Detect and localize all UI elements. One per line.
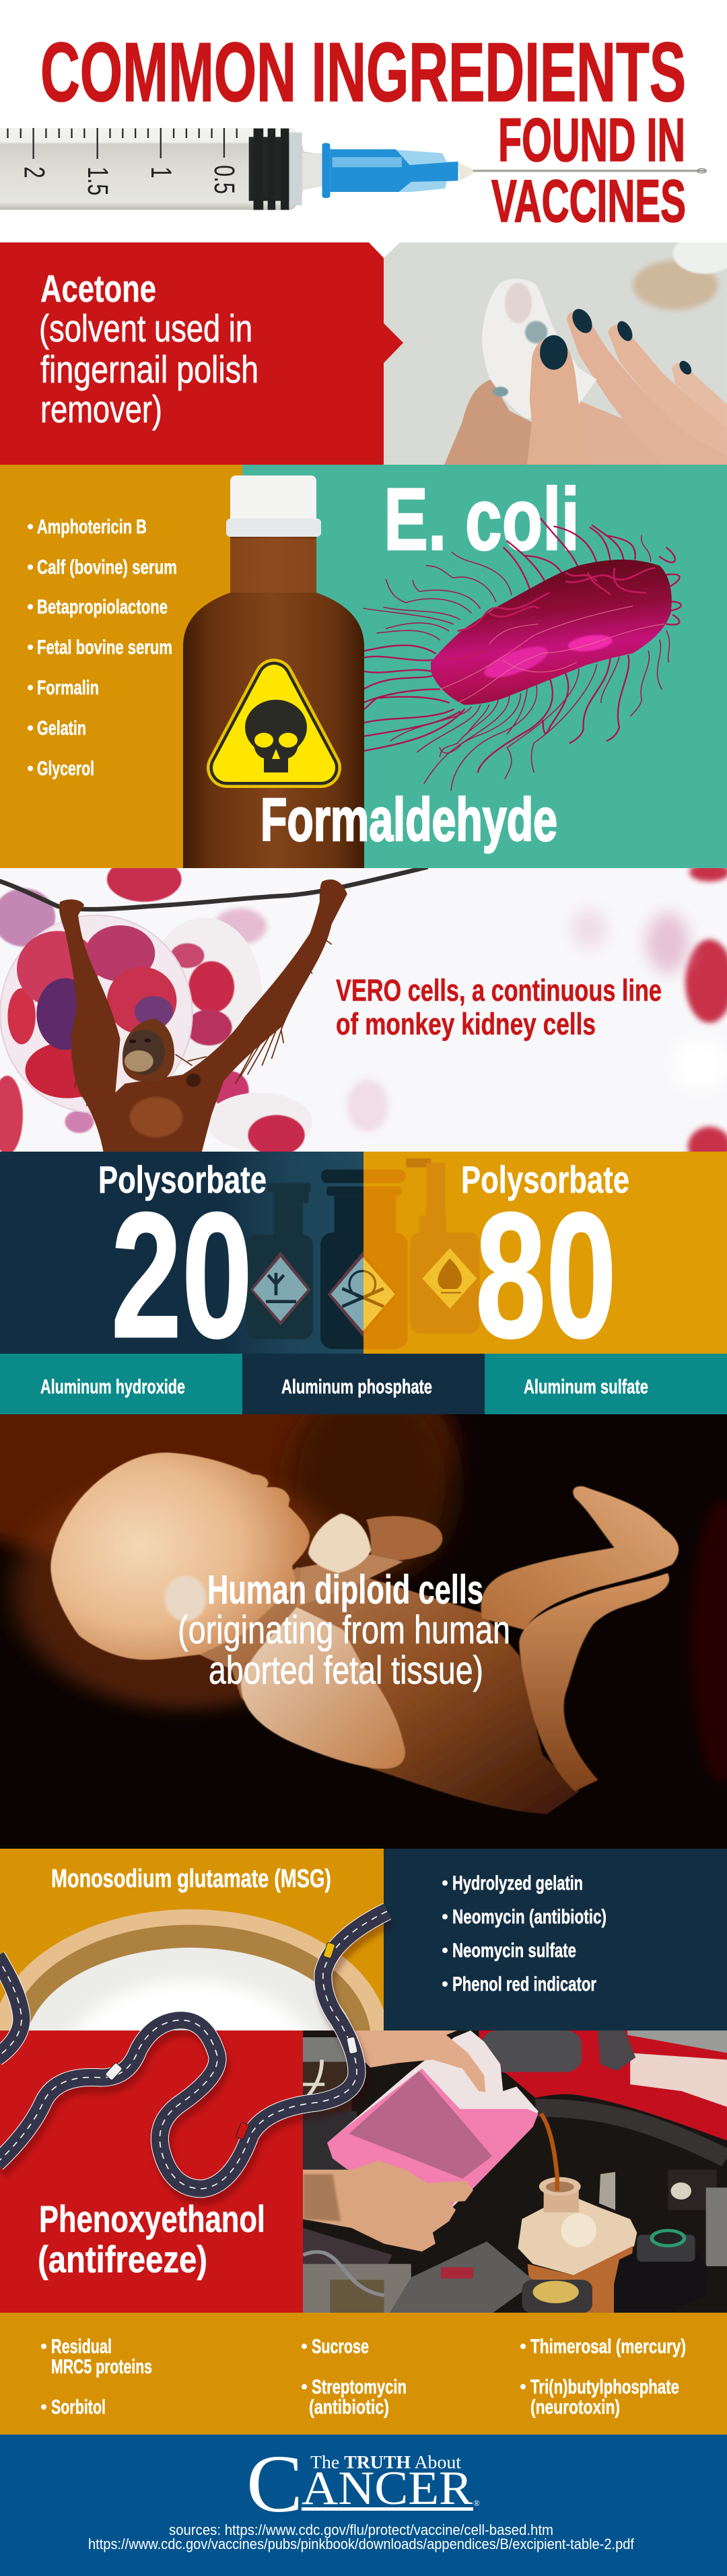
icon: skull hazard label (227, 679, 321, 772)
icon: white car 2 (105, 2062, 123, 2081)
list: ingredients: Calf (bovine) serum (37, 556, 177, 579)
panel: footer (0, 2435, 727, 2576)
panel: acetone (0, 234, 727, 465)
panel: polysorbate (0, 1152, 727, 1375)
upper hand (354, 2030, 485, 2092)
illustration: e. coli bacterium (364, 519, 681, 790)
bottle cap (226, 475, 321, 537)
list: ingredients: Gelatin (37, 717, 86, 739)
panel: monosodium glutamate (0, 1849, 384, 2030)
label: polysorbate 80: 80 (475, 1176, 617, 1375)
panel: navy ingredient list: Neomycin sulfate (452, 1940, 576, 1962)
label: polysorbate 80: Polysorbate (461, 1158, 629, 1201)
logo: the truth about cancer: C (246, 2439, 303, 2530)
icon: chemical bottles, dark half (247, 1169, 364, 1350)
icon: rope (0, 867, 427, 909)
icon: syringe (0, 128, 707, 210)
icon: bowl of msg (0, 1909, 384, 2030)
illustration: fetus (50, 1453, 679, 1814)
logo: the truth about cancer: ® (473, 2498, 480, 2508)
list column 1: Sorbitol (51, 2396, 106, 2418)
text: solvent description (39, 307, 258, 431)
label: polysorbate 20: Polysorbate (98, 1158, 267, 1201)
text: solvent description: remover) (40, 388, 162, 431)
lower palm (579, 401, 662, 465)
cotton pad (482, 279, 597, 419)
list column 2: Streptomycin (312, 2376, 407, 2398)
list: ingredients (28, 516, 177, 780)
label: aluminum hydroxide: Aluminum hydroxide (40, 1376, 185, 1398)
panel: navy ingredient list: Neomycin (antibiotic) (452, 1906, 607, 1928)
text: sources (88, 2521, 635, 2552)
panel: navy ingredient list (384, 1849, 727, 2030)
engine block (390, 2241, 536, 2313)
icon: syringe: 1 (145, 166, 178, 178)
hand (308, 1513, 371, 1573)
heading: acetone: Acetone (40, 267, 156, 310)
lower leg (519, 1573, 669, 1791)
heading: phenoxyethanol: (antifreeze) (38, 2238, 207, 2280)
radiator cap (522, 2280, 592, 2313)
list column 2 (302, 2336, 407, 2418)
panel: aluminum compounds (0, 1354, 727, 1414)
background cells (685, 863, 727, 1167)
heading: phenoxyethanol: Phenoxyethanol (39, 2198, 265, 2240)
red hood (479, 2030, 727, 2140)
antifreeze jug (327, 2030, 539, 2210)
panel: human diploid cells (0, 1414, 727, 1849)
heading: phenoxyethanol (38, 2198, 265, 2280)
label: polysorbate 20 (98, 1158, 267, 1375)
list column 3: Tri(n)butylphosphate (530, 2376, 679, 2398)
list: ingredients: Formalin (37, 677, 99, 699)
list: ingredients: Amphotericin B (37, 516, 147, 538)
rubber seal (536, 2108, 727, 2158)
label: polysorbate 20: 20 (111, 1176, 252, 1375)
text: human diploid cells: Human diploid cells (207, 1567, 483, 1612)
text: vero cells description: of monkey kidney cells (336, 1007, 596, 1041)
icon: yellow car (323, 1942, 335, 1958)
label: msg: Monosodium glutamate (MSG) (51, 1865, 331, 1893)
logo: the truth about cancer: ANCER (302, 2462, 473, 2515)
icon: syringe: 2 (19, 166, 51, 178)
label: aluminum sulfate: Aluminum sulfate (524, 1376, 648, 1398)
icon: syringe: 0.5 (209, 165, 241, 194)
text: solvent description: fingernail polish (40, 348, 258, 391)
list column 2: (antibiotic) (309, 2396, 389, 2418)
head (50, 1453, 310, 1659)
finger c (672, 363, 727, 431)
black bottle with green cap (614, 2231, 709, 2313)
illustration: orangutan (59, 880, 347, 1152)
list column 1: Residual (51, 2336, 112, 2358)
lit arm (241, 1607, 405, 1769)
coolant reservoir (518, 2177, 637, 2313)
list column 2: Sucrose (312, 2336, 369, 2358)
list: ingredients: Glycerol (37, 758, 94, 780)
text: human diploid cells: aborted fetal tissue) (209, 1649, 483, 1692)
photo: pouring antifreeze into car engine (303, 2030, 727, 2313)
panel: navy ingredient list: Phenol red indicator (452, 1973, 596, 1995)
list column 1 (41, 2336, 152, 2418)
list: ingredients: Fetal bovine serum (37, 636, 172, 659)
label: polysorbate 80 (461, 1158, 629, 1375)
thumb (528, 337, 582, 465)
photo: fingernail polish removal (384, 234, 727, 465)
panel: phenoxyethanol (0, 2030, 303, 2313)
icon: chemical bottles, amber half (364, 1158, 479, 1350)
list column 3 (520, 2336, 686, 2418)
icon: brown poison bottle (183, 475, 364, 868)
text: human diploid cells: (originating from human (178, 1608, 510, 1652)
list column 3: (neurotoxin) (530, 2396, 620, 2418)
heading: e. coli: E. coli (384, 469, 580, 568)
logo: the truth about cancer (246, 2439, 480, 2530)
lower hand (303, 2160, 473, 2251)
list column 1: MRC5 proteins (51, 2356, 152, 2378)
text: solvent description: (solvent used in (39, 307, 252, 350)
finger a (567, 311, 727, 465)
text: vero cells description (336, 973, 662, 1041)
upper leg and foot (481, 1486, 679, 1630)
panel: vero cells (0, 857, 727, 1167)
panel: remaining ingredients (0, 2313, 727, 2435)
icon: winding road with cars (0, 1911, 390, 2195)
icon: syringe: 1.5 (82, 166, 114, 195)
label: aluminum phosphate: Aluminum phosphate (281, 1376, 432, 1398)
icon: white car 1 (347, 2037, 357, 2054)
title (40, 26, 686, 234)
forearm (366, 1516, 442, 1560)
list: ingredients: Betapropiolactone (37, 596, 168, 618)
text: sources: sources: https://www.cdc.gov/flu/protect/vaccine/cell-based.htm (169, 2521, 553, 2538)
cell cluster and orangutan (0, 857, 427, 1156)
heading: formaldehyde: Formaldehyde (261, 787, 557, 854)
logo: the truth about cancer: The TRUTH About (310, 2452, 462, 2472)
left hand (444, 379, 532, 465)
panel: formaldehyde and e. coli (0, 465, 727, 868)
text: sources: https://www.cdc.gov/vaccines/pubs/pinkbook/downloads/appendices/B/excipient-table-2.pdf (88, 2536, 635, 2552)
text: human diploid cells (178, 1567, 510, 1692)
finger b (608, 325, 727, 458)
panel: navy ingredient list: Hydrolyzed gelatin (452, 1872, 583, 1894)
icon: red car (236, 2122, 249, 2140)
red label panel with arrow (0, 242, 403, 465)
